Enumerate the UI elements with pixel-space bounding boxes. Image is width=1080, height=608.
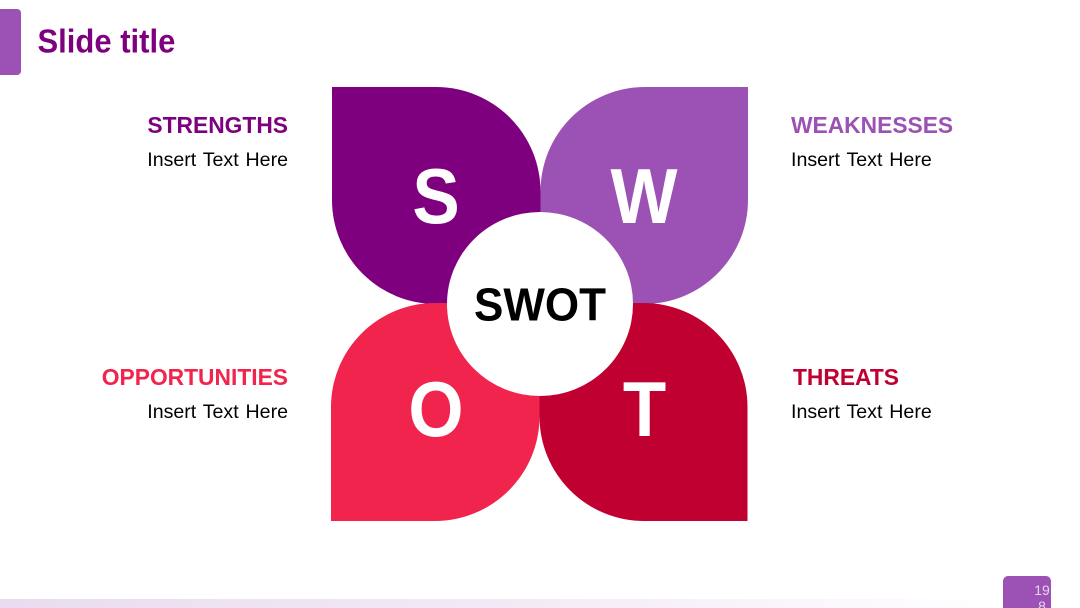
center circle — [447, 212, 633, 396]
threats text: Insert Text Here — [791, 401, 932, 423]
page number badge: 19 — [1034, 582, 1050, 598]
page number badge — [1003, 576, 1051, 608]
petal: threats — [540, 303, 748, 521]
petal: weaknesses: W — [610, 152, 678, 240]
title: Slide title — [38, 23, 175, 60]
footer gradient band — [0, 599, 1004, 608]
weaknesses text: Insert Text Here — [791, 149, 932, 171]
petal: threats: T — [623, 365, 666, 453]
weaknesses heading: WEAKNESSES — [791, 112, 953, 138]
threats heading: THREATS — [793, 364, 899, 390]
opportunities text: Insert Text Here — [147, 401, 288, 423]
petal: weaknesses — [540, 87, 748, 304]
petal: strengths: S — [412, 152, 460, 240]
strengths text: Insert Text Here — [147, 149, 288, 171]
petal: opportunities — [331, 303, 540, 521]
opportunities heading: OPPORTUNITIES — [102, 364, 288, 390]
title accent tab — [0, 9, 21, 75]
petal: strengths — [332, 87, 540, 304]
strengths heading: STRENGTHS — [147, 112, 288, 138]
center circle: SWOT — [474, 279, 606, 331]
petal: opportunities: O — [408, 365, 464, 453]
